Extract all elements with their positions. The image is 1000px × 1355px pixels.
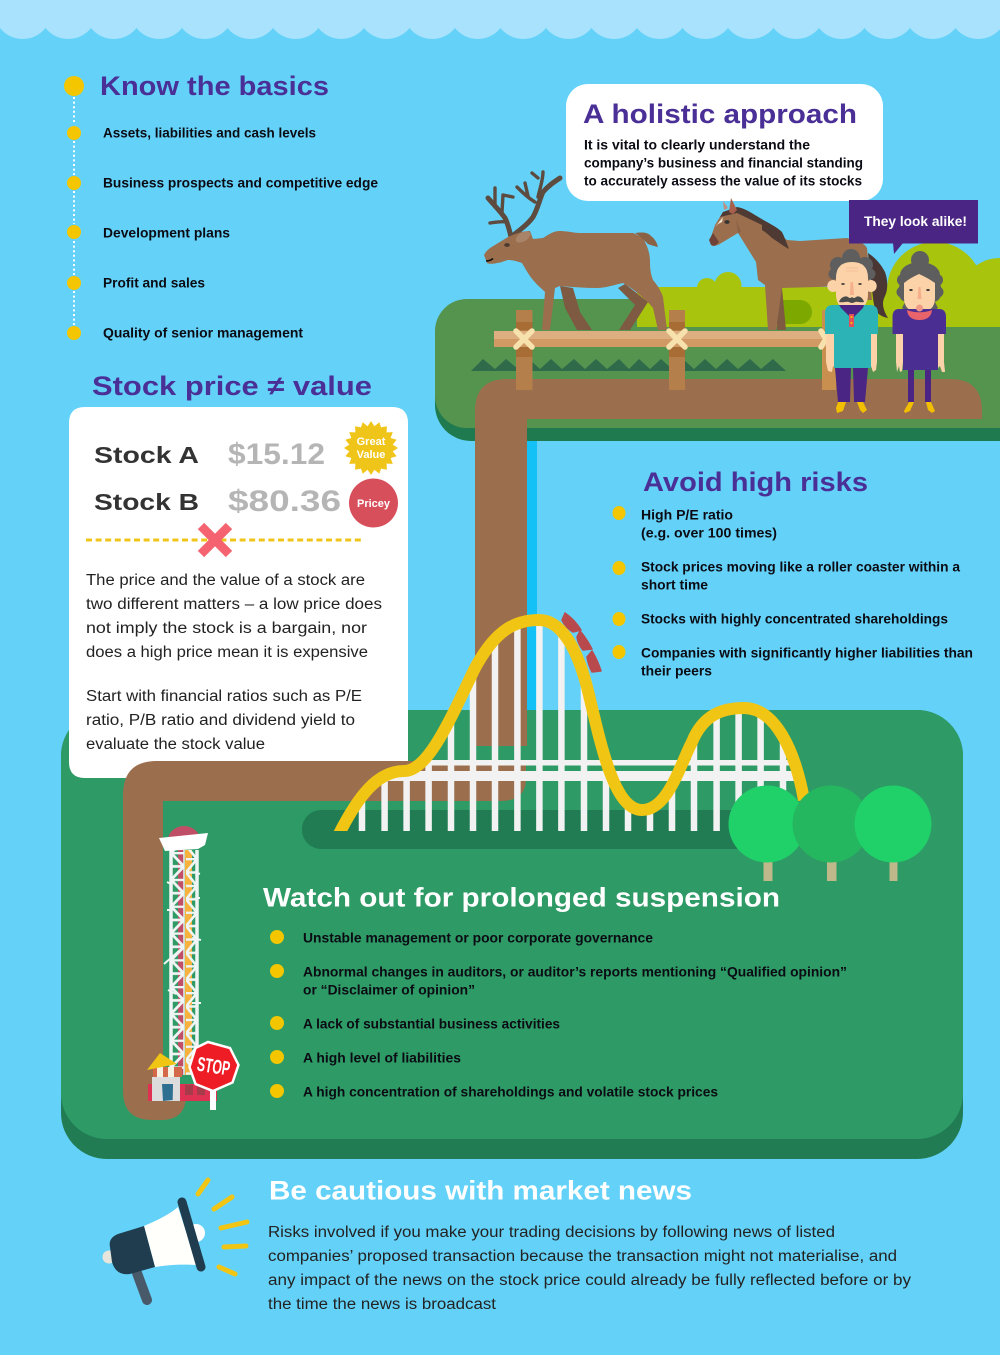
- stock card text: [86, 572, 382, 753]
- stock card text: not imply the stock is a bargain, nor: [86, 620, 367, 637]
- roller coaster: [336, 613, 804, 840]
- panel: watch out for prolonged suspension: Abnormal changes in auditors, or auditor’s reports mentioning “Qualified opinion”: [303, 964, 847, 980]
- coaster cars: [562, 613, 601, 672]
- panel: holistic approach bubble: to accurately assess the value of its stocks: [584, 174, 862, 188]
- horse: [709, 198, 888, 330]
- panel: avoid high risks: Stock prices moving like a roller coaster within a: [641, 560, 960, 574]
- speech box: [849, 200, 978, 254]
- icon: megaphone: [102, 1180, 247, 1300]
- panel: be cautious with market news: any impact of the news on the stock price could already be fully reflected before or by: [268, 1272, 911, 1289]
- panel: be cautious with market news: [268, 1176, 911, 1313]
- stock card text: evaluate the stock value: [86, 736, 265, 753]
- panel: know the basics: Profit and sales: [103, 276, 205, 290]
- panel: be cautious with market news: the time the news is broadcast: [268, 1296, 497, 1313]
- badge: great value: [344, 421, 398, 475]
- badge: pricey: Pricey: [357, 498, 391, 510]
- stop sign: [190, 1042, 238, 1110]
- panel: watch out for prolonged suspension: or “Disclaimer of opinion”: [303, 982, 475, 998]
- coaster supports: [362, 620, 783, 831]
- stock labels and prices: Stock B: [94, 489, 199, 515]
- blue strip behind road: [527, 436, 537, 716]
- stop sign: STOP: [195, 1054, 232, 1081]
- panel: be cautious with market news: Risks involved if you make your trading decisions by following news of listed: [268, 1224, 835, 1241]
- heading: know the basics: Know the basics: [100, 71, 329, 101]
- stock card text: does a high price mean it is expensive: [86, 644, 368, 661]
- panel: avoid high risks: Companies with significantly higher liabilities than: [641, 646, 973, 660]
- panel: avoid high risks: short time: [641, 578, 708, 592]
- badge: pricey: [349, 478, 398, 528]
- panel: holistic approach bubble: company’s business and financial standing: [584, 156, 863, 170]
- panel: watch out for prolonged suspension: A lack of substantial business activities: [303, 1016, 560, 1032]
- woman: [892, 251, 946, 413]
- panel: holistic approach bubble: It is vital to clearly understand the: [584, 138, 811, 152]
- upper land: [435, 299, 1000, 441]
- panel: watch out for prolonged suspension: Unstable management or poor corporate governance: [303, 930, 653, 946]
- coaster track: [336, 620, 804, 840]
- bushes on upper land: [637, 244, 1000, 327]
- badge: great value: Value: [357, 449, 385, 461]
- panel: watch out for prolonged suspension: A high level of liabilities: [303, 1050, 461, 1066]
- heading: be cautious: Be cautious with market news: [269, 1176, 692, 1206]
- stock labels and prices: Stock A: [94, 442, 199, 468]
- heading: watch out: Watch out for prolonged suspension: [263, 882, 780, 912]
- panel: stock price card: [69, 407, 408, 778]
- big green panel: [61, 710, 963, 1159]
- heading: stock price not equal value: Stock price ≠ value: [92, 371, 372, 401]
- panel: holistic approach bubble: [566, 84, 883, 201]
- fence: [494, 310, 836, 390]
- heading: avoid high risks: Avoid high risks: [643, 467, 868, 497]
- stock card text: Start with financial ratios such as P/E: [86, 688, 362, 705]
- coaster rails: [387, 760, 796, 781]
- panel: know the basics: Quality of senior management: [103, 326, 304, 340]
- stock labels and prices: [94, 438, 341, 518]
- trees: [728, 786, 932, 881]
- mountains row: [471, 359, 786, 371]
- panel: watch out for prolonged suspension: [263, 882, 847, 1100]
- dark base under coaster: [302, 810, 762, 849]
- dashed divider with cross: [86, 526, 361, 554]
- panel: avoid high risks: [612, 467, 973, 678]
- stock labels and prices: $15.12: [228, 438, 325, 471]
- stock labels and prices: $80.36: [228, 485, 341, 518]
- panel: avoid high risks: High P/E ratio: [641, 508, 733, 522]
- panel: know the basics: [64, 71, 378, 340]
- panel: avoid high risks: their peers: [641, 664, 712, 678]
- lower brown road: [123, 761, 526, 1120]
- shop and base: [147, 1053, 217, 1101]
- sky scalloped band: [0, 0, 1000, 39]
- panel: be cautious with market news: companies’ proposed transaction because the transaction might not materialise, and: [268, 1248, 897, 1265]
- panel: avoid high risks: (e.g. over 100 times): [641, 526, 777, 540]
- stock card text: The price and the value of a stock are: [86, 572, 365, 589]
- panel: know the basics: Business prospects and competitive edge: [103, 176, 378, 190]
- speech box: They look alike!: [864, 214, 967, 229]
- badge: great value: Great: [357, 436, 386, 448]
- drop tower: [159, 826, 208, 1075]
- panel: avoid high risks: Stocks with highly concentrated shareholdings: [641, 612, 948, 626]
- panel: watch out for prolonged suspension: A high concentration of shareholdings and volatile stock prices: [303, 1084, 718, 1100]
- upper brown road: [475, 379, 982, 746]
- stock card text: two different matters – a low price does: [86, 596, 382, 613]
- heading: holistic approach: A holistic approach: [583, 99, 857, 129]
- panel: know the basics: Development plans: [103, 226, 230, 240]
- man: [825, 249, 878, 413]
- deer: [484, 172, 667, 330]
- stock card text: ratio, P/B ratio and dividend yield to: [86, 712, 355, 729]
- panel: know the basics: Assets, liabilities and cash levels: [103, 126, 316, 140]
